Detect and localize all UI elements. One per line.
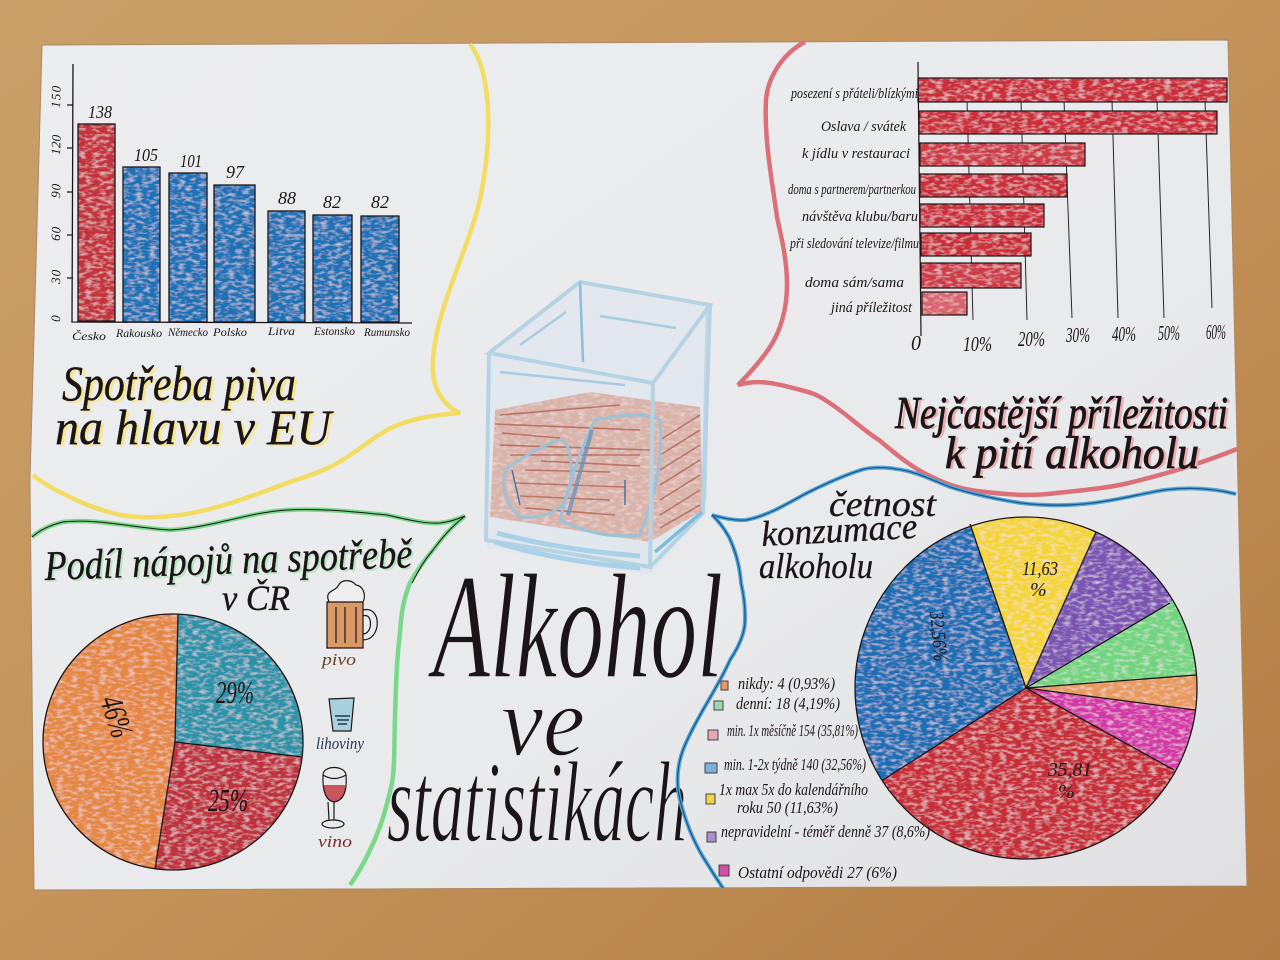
glass outline — [486, 282, 710, 568]
legend: nikdy: 4 (0,93%) — [738, 674, 835, 693]
title: Alkohol ve statistikách — [387, 544, 723, 866]
pie chart: frequency: 35,81 — [1047, 759, 1092, 781]
bar chart: occasions: doma s partnerem/partnerkou — [788, 182, 916, 198]
legend — [705, 674, 930, 882]
icon: spirits glass: lihoviny — [316, 734, 364, 753]
heading: beverage share: Podíl nápojů na spotřebě — [43, 531, 413, 590]
heading: beverage share: v ČR — [222, 578, 290, 618]
bar chart: occasions: 50% — [1158, 321, 1180, 345]
bar chart: beer per capita: 150 — [48, 85, 64, 108]
panel: occasions for drinking alcohol — [738, 42, 1237, 495]
heading: beer consumption: na hlavu v EU — [55, 399, 334, 455]
yellow panel border — [33, 44, 488, 517]
bar chart: occasions: Oslava / svátek — [821, 119, 906, 135]
bar chart: beer per capita: 60 — [48, 226, 64, 241]
bar chart: beer per capita: 90 — [48, 183, 64, 198]
title: Alkohol ve statistikách: ve — [501, 666, 585, 777]
heading: beer consumption: Spotřeba piva — [65, 357, 299, 413]
bar chart: occasions: 20% — [1018, 327, 1045, 351]
bar chart: beer per capita: 82 — [323, 192, 341, 212]
heading: most frequent occasions — [894, 387, 1231, 479]
bar chart: occasions: k jídlu v restauraci — [802, 146, 910, 162]
liquid — [490, 392, 703, 542]
pie chart: beverages: 29% — [216, 674, 254, 710]
legend: Ostatní odpovědi 27 (6%) — [738, 863, 897, 882]
heading: beer consumption: na hlavu v EU — [58, 401, 337, 457]
bar chart: beer per capita — [48, 64, 412, 343]
heading: beer consumption — [55, 355, 337, 457]
icon: beer mug: pivo — [321, 650, 356, 669]
bar chart: beer per capita: 30 — [48, 269, 64, 285]
bar chart: occasions — [788, 62, 1227, 356]
bar chart: occasions: 0 — [911, 331, 921, 355]
ice cubes — [504, 415, 661, 536]
bar chart: beer per capita: Rumunsko — [363, 325, 410, 339]
bar chart: beer per capita: Polsko — [212, 325, 247, 339]
heading: frequency — [759, 484, 937, 586]
legend: min. 1-2x týdně 140 (32,56%) — [724, 755, 866, 774]
pie chart: beverages: 46% — [93, 691, 141, 742]
heading: beverage share: Podíl nápojů na spotřebě — [45, 533, 415, 592]
title: Alkohol ve statistikách: statistikách — [387, 739, 687, 866]
pie chart: frequency: % — [1030, 579, 1047, 601]
pie chart: beverages: 25% — [208, 782, 248, 818]
bar chart: beer per capita: 0 — [48, 315, 63, 322]
heading: frequency: četnost — [829, 484, 937, 524]
bar chart: occasions: 60% — [1206, 320, 1226, 344]
illustration: glass of whisky with ice — [486, 282, 710, 575]
bar chart: beer per capita: Estonsko — [313, 324, 355, 338]
bar chart: occasions: návštěva klubu/baru — [802, 209, 918, 225]
pie chart: beverages — [42, 613, 304, 871]
glass body tint — [486, 282, 710, 575]
pie chart: frequency: 11,63 — [1022, 558, 1058, 580]
bar chart: beer per capita: 82 — [371, 192, 389, 212]
pie chart: frequency — [854, 516, 1198, 860]
bar chart: beer per capita: Německo — [167, 325, 208, 339]
bar chart: beer per capita: Česko — [72, 329, 106, 343]
bar chart: beer per capita: 101 — [180, 151, 202, 171]
bar chart: beer per capita: 97 — [226, 162, 245, 182]
red panel border — [738, 42, 1237, 495]
panel: frequency of alcohol consumption — [676, 466, 1236, 890]
bar chart: beer per capita: 120 — [48, 134, 64, 155]
icon: wine glass: vino — [318, 832, 352, 851]
bar chart: occasions: 40% — [1112, 322, 1136, 346]
panel: beverage share in Czech consumption — [30, 509, 465, 885]
legend: denní: 18 (4,19%) — [736, 694, 840, 713]
bar chart: occasions: 10% — [963, 332, 992, 356]
bar chart: beer per capita: Litva — [267, 324, 295, 338]
bar chart: beer per capita: Rakousko — [115, 326, 162, 340]
heading: most frequent occasions: k pití alkoholu — [948, 428, 1202, 479]
pie chart: frequency: % — [1058, 781, 1075, 803]
heading: frequency: konzumace — [760, 506, 918, 554]
bar chart: occasions: doma sám/sama — [805, 275, 904, 291]
legend: nepravidelní - téměř denně 37 (8,6%) — [721, 822, 930, 841]
icon: beer mug — [321, 581, 377, 669]
bar chart: occasions: při sledování televize/filmu — [789, 236, 919, 252]
title: Alkohol ve statistikách: Alkohol — [427, 544, 723, 710]
bar chart: beer per capita: 88 — [278, 188, 296, 208]
pie chart: frequency: 32,56% — [925, 610, 951, 662]
bar chart: beer per capita: 138 — [88, 102, 112, 122]
legend: roku 50 (11,63%) — [737, 798, 838, 817]
legend: min. 1x měsíčně 154 (35,81%) — [727, 721, 858, 740]
legend: 1x max 5x do kalendářního — [719, 780, 868, 799]
heading: frequency: alkoholu — [759, 546, 873, 586]
bar chart: occasions: jiná příležitost — [829, 300, 913, 316]
blue panel border — [678, 468, 1236, 888]
green panel border — [32, 509, 465, 885]
icon: spirits glass — [316, 698, 364, 753]
bar chart: occasions: 30% — [1065, 323, 1090, 347]
bar chart: occasions: posezení s přáteli/blízkými — [790, 86, 918, 102]
heading: beer consumption: Spotřeba piva — [62, 355, 296, 411]
panel: beer consumption in EU — [33, 44, 488, 517]
icon: wine glass — [318, 768, 352, 851]
bar chart: beer per capita: 105 — [134, 145, 158, 165]
heading: beverage share — [43, 531, 415, 618]
heading: most frequent occasions: k pití alkoholu — [945, 427, 1199, 478]
